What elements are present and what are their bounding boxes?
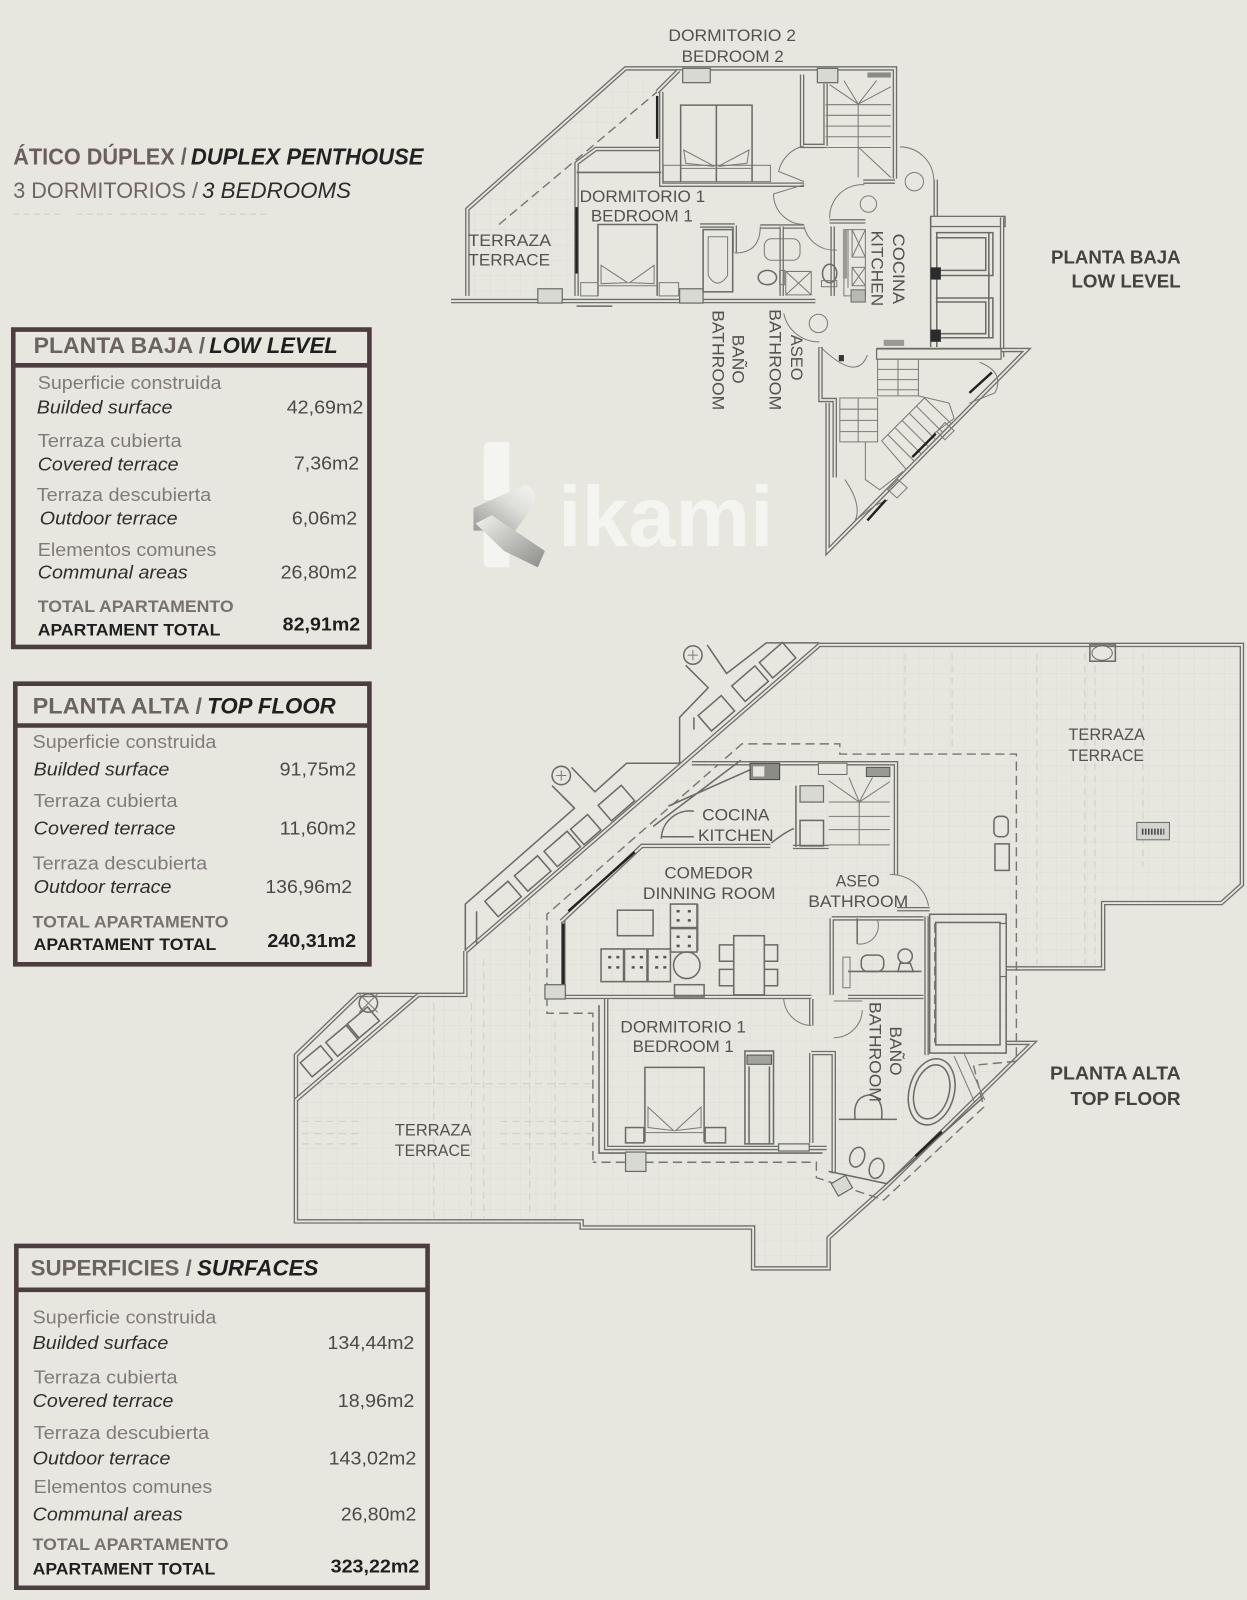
panel: superficies / surfaces: 134,44m2 — [328, 1332, 414, 1353]
label: bano low level: BATHROOM — [708, 310, 726, 410]
panel: superficies / surfaces: SURFACES — [197, 1256, 318, 1281]
label: dormitorio 1 low level: DORMITORIO 1 — [580, 188, 705, 206]
label: terraza right: TERRACE — [1068, 747, 1144, 765]
panel: planta baja / low level: 7,36m2 — [294, 452, 359, 473]
panel: planta baja / low level: LOW LEVEL — [209, 333, 338, 358]
panel: planta baja / low level: 42,69m2 — [287, 396, 363, 417]
panel: planta baja / low level: 6,06m2 — [292, 507, 357, 528]
label: dormitorio 1 top floor — [620, 1019, 746, 1056]
label: planta baja — [1051, 246, 1181, 292]
bed: bedroom 1 — [581, 224, 679, 296]
panel: superficies / surfaces: TOTAL APARTAMENTO — [33, 1536, 229, 1554]
label: dormitorio 1 low level — [580, 188, 705, 225]
label: terraza right: TERRAZA — [1068, 726, 1145, 744]
label: dormitorio 1 top floor: DORMITORIO 1 — [620, 1019, 746, 1037]
label: terraza low level: TERRACE — [468, 251, 550, 269]
floor plan: top floor — [296, 642, 1242, 1268]
label: dormitorio 1 low level: BEDROOM 1 — [591, 207, 693, 225]
label: comedor — [643, 865, 776, 903]
label: aseo low level — [765, 309, 805, 410]
label: aseo low level: BATHROOM — [765, 309, 783, 410]
panel: planta baja / low level: APARTAMENT TOTAL — [38, 622, 220, 640]
floor plan: low level — [451, 68, 1027, 551]
terrace fixtures: top floor — [994, 645, 1169, 870]
panel: superficies / surfaces: Outdoor terrace — [33, 1447, 170, 1468]
panel: superficies / surfaces: Builded surface — [33, 1332, 168, 1353]
terrace: low level — [451, 68, 895, 301]
label: terraza left: TERRAZA — [395, 1122, 472, 1140]
panel: planta alta / top floor: 240,31m2 — [267, 930, 356, 951]
panel: superficies / surfaces: 18,96m2 — [338, 1390, 414, 1411]
panel: planta alta / top floor: Builded surface — [34, 759, 169, 780]
panel: planta alta / top floor: Superficie construida — [33, 731, 217, 752]
bed: top floor — [626, 1051, 774, 1144]
lift: low level — [931, 216, 1005, 357]
label: cocina top floor: COCINA — [702, 806, 770, 824]
panel: planta baja / low level: Covered terrace — [38, 453, 179, 474]
panel: planta alta / top floor: Covered terrace — [34, 818, 176, 839]
panel: superficies / surfaces — [16, 1246, 428, 1588]
lift: top floor — [930, 914, 1006, 1053]
panel: superficies / surfaces: Terraza descubierta — [34, 1422, 210, 1443]
panel: superficies / surfaces: APARTAMENT TOTAL — [33, 1560, 215, 1578]
balconies: top floor — [300, 642, 819, 1077]
label: aseo top floor: BATHROOM — [808, 893, 908, 911]
label: terraza low level: TERRAZA — [468, 232, 551, 250]
logo: ikami watermark: ikami — [558, 469, 774, 565]
panel: planta alta / top floor — [15, 684, 369, 964]
panel: planta alta / top floor: TOP FLOOR — [207, 693, 337, 718]
panel: planta alta / top floor: Outdoor terrace — [34, 876, 171, 897]
label: aseo top floor — [808, 873, 908, 911]
outer walls: top floor — [296, 645, 1242, 1268]
panel: superficies / surfaces: 143,02m2 — [329, 1447, 416, 1468]
logo: ikami watermark — [473, 442, 774, 567]
label: bano low level: BAÑO — [729, 335, 748, 384]
panel: planta baja / low level: Builded surface — [37, 396, 172, 417]
panel: planta alta / top floor: Terraza descubierta — [33, 852, 208, 873]
overhang dashed outline: top floor — [547, 744, 1016, 1200]
bathroom fixtures: low level — [703, 230, 837, 295]
panel: planta baja / low level: Terraza descubierta — [37, 484, 212, 505]
label: aseo top floor: ASEO — [836, 873, 880, 891]
panel: planta alta / top floor: 91,75m2 — [280, 759, 356, 780]
label: planta baja: PLANTA BAJA — [1051, 246, 1181, 267]
title: 3 BEDROOMS — [202, 178, 351, 203]
panel: planta baja / low level — [13, 330, 369, 647]
label: planta alta: PLANTA ALTA — [1050, 1063, 1181, 1084]
panel: planta baja / low level: PLANTA BAJA / — [34, 333, 206, 358]
label: dormitorio 2: DORMITORIO 2 — [668, 27, 796, 45]
label: comedor: DINNING ROOM — [643, 885, 776, 903]
label: planta alta: TOP FLOOR — [1070, 1088, 1181, 1109]
panel: planta alta / top floor: 11,60m2 — [280, 818, 356, 839]
panel: planta alta / top floor: TOTAL APARTAMENTO — [33, 914, 229, 932]
panel: superficies / surfaces: 323,22m2 — [331, 1555, 419, 1576]
kitchen fixtures: top floor — [661, 763, 824, 847]
panel: superficies / surfaces: SUPERFICIES / — [31, 1256, 193, 1281]
stairs: upper flight low level — [826, 72, 891, 178]
stair core triangle: low level — [820, 340, 1027, 551]
panel: planta baja / low level: 82,91m2 — [283, 614, 360, 635]
title: ÁTICO DÚPLEX / — [13, 142, 187, 169]
panel: planta baja / low level: TOTAL APARTAMENTO — [38, 598, 234, 616]
stairs: top floor — [818, 763, 890, 845]
label: dormitorio 2 — [668, 27, 796, 66]
label: terraza right — [1068, 726, 1145, 765]
label: bano top floor: BAÑO — [886, 1027, 905, 1076]
label: terraza left: TERRACE — [395, 1142, 471, 1160]
panel: superficies / surfaces: Communal areas — [33, 1503, 183, 1524]
panel: planta baja / low level: Outdoor terrace — [40, 507, 178, 528]
label: bano top floor: BATHROOM — [865, 1002, 883, 1102]
label: comedor: COMEDOR — [664, 865, 753, 883]
panel: planta baja / low level: Terraza cubierta — [38, 430, 182, 451]
title — [13, 142, 425, 214]
spa bathtub — [901, 1054, 962, 1130]
label: bano low level — [708, 310, 748, 410]
panel: planta baja / low level: Elementos comunes — [38, 539, 216, 560]
panel: planta baja / low level: Communal areas — [38, 562, 188, 583]
walls: top floor — [545, 760, 985, 1196]
label: terraza left — [395, 1122, 472, 1160]
label: cocina low level — [867, 231, 907, 306]
dining furniture — [601, 904, 778, 997]
label: cocina top floor: KITCHEN — [698, 827, 774, 845]
label: planta alta — [1050, 1063, 1181, 1109]
label: dormitorio 1 top floor: BEDROOM 1 — [633, 1038, 734, 1056]
panel: superficies / surfaces: Terraza cubierta — [34, 1367, 178, 1388]
panel: planta baja / low level: 26,80m2 — [281, 562, 357, 583]
label: terraza low level — [468, 232, 551, 269]
doors: top floor — [784, 874, 929, 1038]
panel: superficies / surfaces: Superficie construida — [33, 1306, 217, 1327]
label: aseo low level: ASEO — [787, 335, 805, 381]
label: cocina low level: COCINA — [889, 234, 907, 304]
label: planta baja: LOW LEVEL — [1071, 271, 1181, 292]
bathroom fixtures: top floor — [843, 949, 913, 1180]
kitchen units: low level — [843, 230, 865, 302]
label: bano top floor — [865, 1002, 905, 1102]
bed: bedroom 2 — [663, 105, 770, 182]
panel: planta alta / top floor: Terraza cubierta — [34, 790, 178, 811]
title: 3 DORMITORIOS / — [13, 178, 199, 203]
panel: planta alta / top floor: APARTAMENT TOTAL — [34, 936, 216, 954]
label: dormitorio 2: BEDROOM 2 — [682, 48, 784, 66]
panel: planta alta / top floor: 136,96m2 — [265, 876, 352, 897]
terraces: top floor — [296, 645, 1242, 1268]
panel: planta alta / top floor: PLANTA ALTA / — [33, 693, 203, 718]
panel: superficies / surfaces: Elementos comunes — [34, 1476, 212, 1497]
panel: superficies / surfaces: 26,80m2 — [341, 1503, 416, 1524]
panel: planta baja / low level: Superficie construida — [38, 372, 222, 393]
walls: low level — [538, 68, 936, 306]
panel: superficies / surfaces: Covered terrace — [33, 1390, 173, 1411]
doors: low level — [735, 146, 934, 342]
title: DUPLEX PENTHOUSE — [191, 143, 425, 169]
label: cocina top floor — [698, 806, 774, 845]
label: cocina low level: KITCHEN — [867, 231, 885, 306]
